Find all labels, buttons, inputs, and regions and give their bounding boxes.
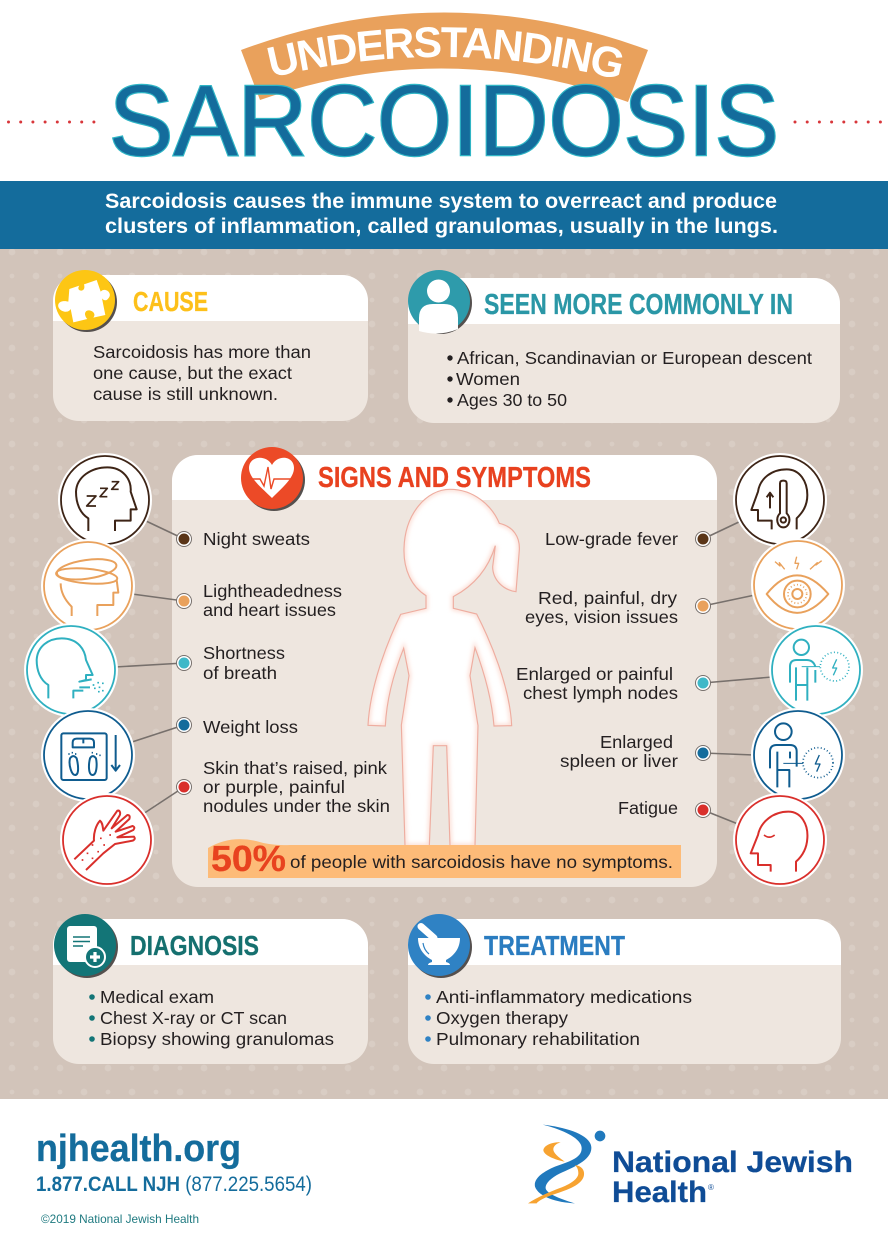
heading: diagnosis: DIAGNOSIS	[130, 930, 259, 961]
footer: phone: 1.877.CALL NJH (877.225.5654)	[36, 1173, 312, 1196]
panel: diagnosis	[53, 914, 368, 1064]
panel: seen more commonly in	[408, 270, 840, 423]
icon: sleeping head	[58, 453, 152, 547]
icon: spleen or liver	[751, 708, 845, 802]
right symptom labels: Enlarged or painful	[516, 664, 673, 684]
connector: lightheadedness	[132, 594, 192, 608]
icon: medical document	[54, 914, 118, 978]
intro band: clusters of inflammation, called granulomas, usually in the lungs.	[105, 214, 778, 238]
connector: fever	[696, 521, 741, 546]
right symptom labels: Enlarged	[600, 732, 673, 752]
icon: dizzy head	[41, 539, 135, 633]
connector: spleen	[696, 746, 754, 760]
right symptom labels: eyes, vision issues	[525, 607, 678, 627]
logo: national jewish health	[528, 1125, 853, 1209]
title: sarcoidosis: SARCOIDOSIS	[109, 65, 779, 177]
right symptom labels: chest lymph nodes	[523, 683, 678, 703]
panel: cause	[53, 270, 368, 421]
icon: person	[408, 270, 472, 334]
icon: heart	[241, 447, 305, 511]
left symptom labels: or purple, painful	[203, 777, 345, 797]
seen list	[447, 348, 812, 410]
callout: 50 percent	[208, 838, 681, 879]
right symptom labels: Low-grade fever	[545, 529, 678, 549]
connector: chest lymph nodes	[696, 676, 772, 690]
callout: 50 percent: 50%	[211, 838, 286, 879]
treatment list: Oxygen therapy	[436, 1008, 568, 1028]
right symptom labels: Red, painful, dry	[538, 588, 677, 608]
connector: fatigue	[696, 802, 738, 824]
footer: web address: njhealth.org	[36, 1128, 241, 1170]
right symptom labels: spleen or liver	[560, 751, 678, 771]
icon: painful eye	[751, 538, 845, 632]
heading: treatment: TREATMENT	[484, 930, 625, 961]
icon: chest lymph nodes	[769, 623, 863, 717]
connector: skin	[143, 780, 192, 814]
diagnosis list: Chest X-ray or CT scan	[100, 1008, 287, 1028]
footer: copyright: ©2019 National Jewish Health	[41, 1212, 199, 1226]
heading: seen more commonly in: SEEN MORE COMMONLY IN	[484, 289, 793, 321]
left symptom labels: and heart issues	[203, 600, 336, 620]
right symptom labels: Fatigue	[618, 798, 678, 818]
title banner: understanding: UNDERSTANDING	[267, 27, 622, 77]
dotted rule left	[8, 120, 94, 124]
icon: puzzle piece	[55, 270, 117, 332]
left symptom labels: Shortness	[203, 643, 285, 663]
seen list: Ages 30 to 50	[457, 390, 567, 410]
icon: tired head	[733, 793, 827, 887]
icon: scale	[41, 708, 135, 802]
body silhouette	[368, 489, 519, 846]
left symptom labels: Skin that’s raised, pink	[203, 758, 387, 778]
icon: breathing head	[24, 623, 118, 717]
intro band: Sarcoidosis causes the immune system to overreact and produce	[105, 189, 777, 213]
icon: mortar and pestle	[408, 914, 472, 978]
left symptom labels: Lightheadedness	[203, 581, 342, 601]
seen list: African, Scandinavian or European descent	[457, 348, 812, 368]
diagnosis list: Biopsy showing granulomas	[100, 1029, 334, 1049]
connector: weight loss	[132, 718, 192, 742]
treatment list: Anti-inflammatory medications	[436, 987, 692, 1007]
intro band	[0, 181, 888, 249]
cause text: cause is still unknown.	[93, 384, 278, 404]
logo: national jewish health: National Jewish	[612, 1146, 853, 1179]
seen list: Women	[456, 369, 520, 389]
panel: signs and symptoms	[172, 447, 717, 887]
left symptom labels	[203, 529, 390, 816]
cause text	[93, 342, 311, 404]
left symptom labels: of breath	[203, 663, 277, 683]
cause text: Sarcoidosis has more than	[93, 342, 311, 362]
treatment list	[425, 987, 692, 1049]
connector: night sweats	[146, 521, 192, 546]
cause text: one cause, but the exact	[93, 363, 292, 383]
logo: national jewish health: Health	[612, 1176, 707, 1209]
left symptom labels: Weight loss	[203, 717, 298, 737]
logo: national jewish health: ®	[708, 1183, 714, 1192]
diagnosis list	[89, 987, 334, 1049]
heading: cause: CAUSE	[133, 286, 208, 317]
icon: rash on hand	[60, 793, 154, 887]
connector: eyes	[696, 595, 755, 614]
panel: treatment	[408, 914, 841, 1064]
logo mark	[528, 1125, 605, 1203]
diagnosis list: Medical exam	[100, 987, 214, 1007]
dotted rule right	[795, 120, 882, 124]
treatment list: Pulmonary rehabilitation	[436, 1029, 640, 1049]
left symptom labels: Night sweats	[203, 529, 310, 549]
connector: shortness of breath	[115, 656, 192, 670]
heading: signs and symptoms: SIGNS AND SYMPTOMS	[318, 462, 591, 494]
patterned tan panel	[0, 249, 888, 1099]
left symptom labels: nodules under the skin	[203, 796, 390, 816]
callout: 50 percent: of people with sarcoidosis have no symptoms.	[290, 852, 673, 872]
icon: head with thermometer	[733, 453, 827, 547]
right symptom labels	[516, 529, 678, 818]
